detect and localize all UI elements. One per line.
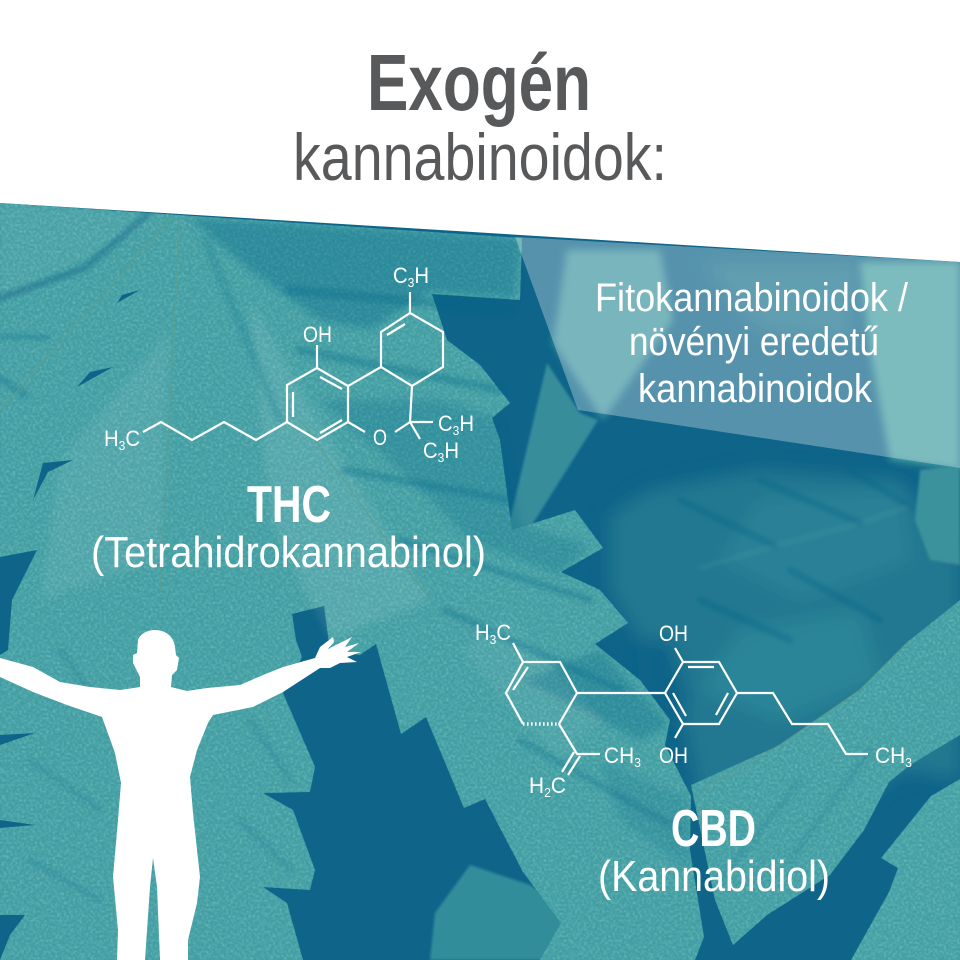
- title: kannabinoidok:: [293, 120, 667, 194]
- icon: human silhouette with raised arms: [0, 630, 361, 960]
- molecule: CBD: CH: [604, 743, 636, 768]
- molecule: CBD: CH: [875, 743, 907, 768]
- molecule: THC: H: [104, 426, 120, 451]
- molecule: THC: O: [373, 425, 387, 450]
- translucent callout panel: kannabinoidok: [638, 367, 873, 411]
- molecule: THC: OH: [303, 322, 332, 347]
- label: CBD: CBD: [671, 800, 756, 858]
- molecule: THC: 3: [408, 275, 414, 290]
- molecule: CBD: 3: [490, 632, 496, 647]
- molecule: THC: [104, 263, 474, 465]
- dim leaf creases: [680, 470, 910, 640]
- leaf veins: [0, 217, 910, 790]
- leaf shading: [0, 205, 690, 870]
- molecule: THC: 3: [119, 438, 125, 453]
- molecule: THC: H: [414, 263, 429, 288]
- molecule: THC: 3: [453, 423, 459, 438]
- molecule: CBD: H: [475, 620, 491, 645]
- label: THC: THC: [247, 476, 331, 534]
- leaf gaps: [0, 290, 140, 960]
- translucent callout panel: Fitokannabinoidok /: [595, 276, 909, 320]
- molecule: CBD: C: [551, 773, 566, 798]
- label: THC: [91, 476, 486, 577]
- label: THC: (Tetrahidrokannabinol): [91, 528, 486, 577]
- title: Exogén: [367, 38, 591, 127]
- title: [293, 38, 667, 194]
- molecule: CBD: OH: [659, 621, 688, 646]
- molecule: CBD: 2: [544, 785, 551, 800]
- molecule: CBD: H: [529, 773, 545, 798]
- molecule: THC: 3: [438, 450, 444, 465]
- molecule: THC: C: [393, 263, 409, 288]
- molecule: CBD: OH: [659, 743, 688, 768]
- background photo: cannabis leaves: [0, 200, 960, 960]
- label: CBD: (Kannabidiol): [598, 852, 830, 901]
- molecule: CBD: C: [496, 620, 511, 645]
- molecule: THC: C: [438, 411, 454, 436]
- molecule: CBD: 3: [634, 755, 641, 770]
- molecule: THC: C: [423, 438, 439, 463]
- molecule: CBD: 3: [905, 755, 912, 770]
- molecule: THC: H: [444, 438, 459, 463]
- translucent callout panel: növényi eredetű: [629, 320, 879, 364]
- molecule: THC: C: [125, 426, 140, 451]
- molecule: THC: H: [459, 411, 474, 436]
- leaf creases: [0, 214, 870, 900]
- label: CBD: [598, 800, 830, 901]
- molecule: CBD: [475, 620, 912, 800]
- translucent callout panel: [515, 237, 960, 468]
